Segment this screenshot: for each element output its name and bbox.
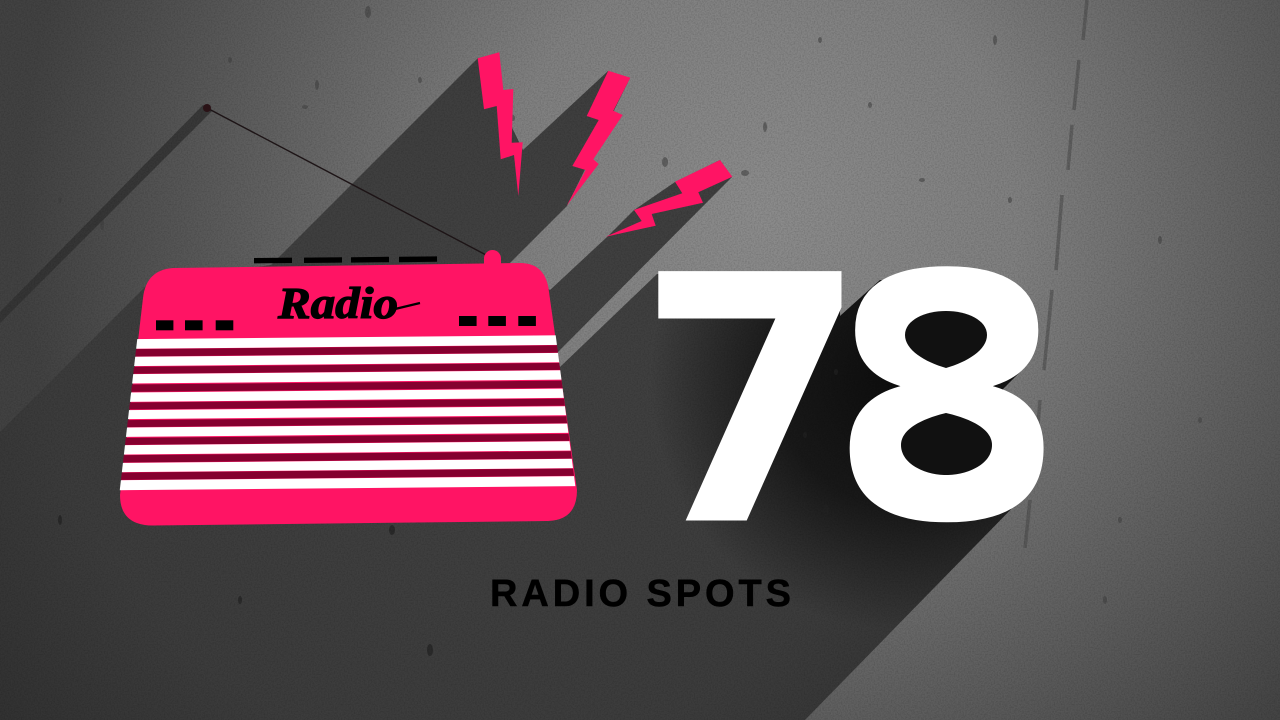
- radio body: [120, 263, 577, 526]
- shadow specks: [58, 369, 838, 656]
- big number 78: 7: [636, 203, 868, 602]
- wall specks and crack: [58, 0, 1202, 604]
- antenna: [203, 104, 488, 256]
- long shadow: antenna tip: [0, 105, 212, 323]
- bolt right: [606, 160, 732, 237]
- antenna knob: [484, 250, 501, 268]
- speaker grille: [110, 335, 590, 490]
- left indicator lights: [156, 320, 233, 330]
- bolt left: [478, 52, 523, 196]
- icon: lightning bolts: [478, 52, 732, 237]
- top dashes: [254, 256, 437, 263]
- right indicator lights: [459, 316, 536, 326]
- long shadow: radio, bolts and number: [0, 58, 1021, 720]
- bolt middle: [567, 71, 630, 206]
- big number 78: 8: [829, 204, 1065, 597]
- icon: radio: [110, 104, 590, 526]
- label: radio spots: RADIO SPOTS: [490, 573, 791, 615]
- counters of the 8: [886, 295, 1006, 492]
- radio logo: Radio: [277, 279, 398, 328]
- big number 78: [636, 203, 1065, 602]
